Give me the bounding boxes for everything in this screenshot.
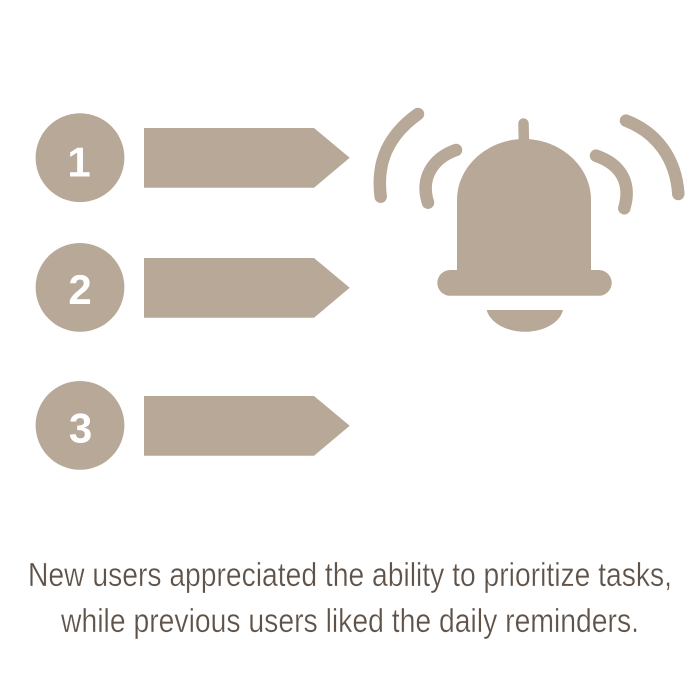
number badge 2 xyxy=(36,243,124,332)
number badge 3 xyxy=(36,381,124,470)
number badge 2: 2 xyxy=(68,266,92,313)
outer right sound wave xyxy=(626,121,678,194)
arrow banner 1 xyxy=(144,128,350,188)
caption text xyxy=(28,556,672,639)
arrow banner 3 xyxy=(144,396,350,456)
inner right sound wave xyxy=(596,156,627,208)
bell top stem xyxy=(518,124,529,146)
list item 2 xyxy=(36,243,350,332)
bell base xyxy=(437,270,612,296)
number badge 1 xyxy=(36,113,124,202)
list item 3 xyxy=(36,381,350,470)
inner left sound wave xyxy=(426,150,456,203)
outer left sound wave xyxy=(380,114,418,197)
number badge 1: 1 xyxy=(67,138,91,186)
bell body xyxy=(457,139,591,275)
list item 1 xyxy=(36,113,350,202)
bell clapper xyxy=(487,310,563,332)
icon: ringing bell xyxy=(380,114,678,332)
number badge 3: 3 xyxy=(69,404,92,452)
arrow banner 2 xyxy=(144,258,350,318)
